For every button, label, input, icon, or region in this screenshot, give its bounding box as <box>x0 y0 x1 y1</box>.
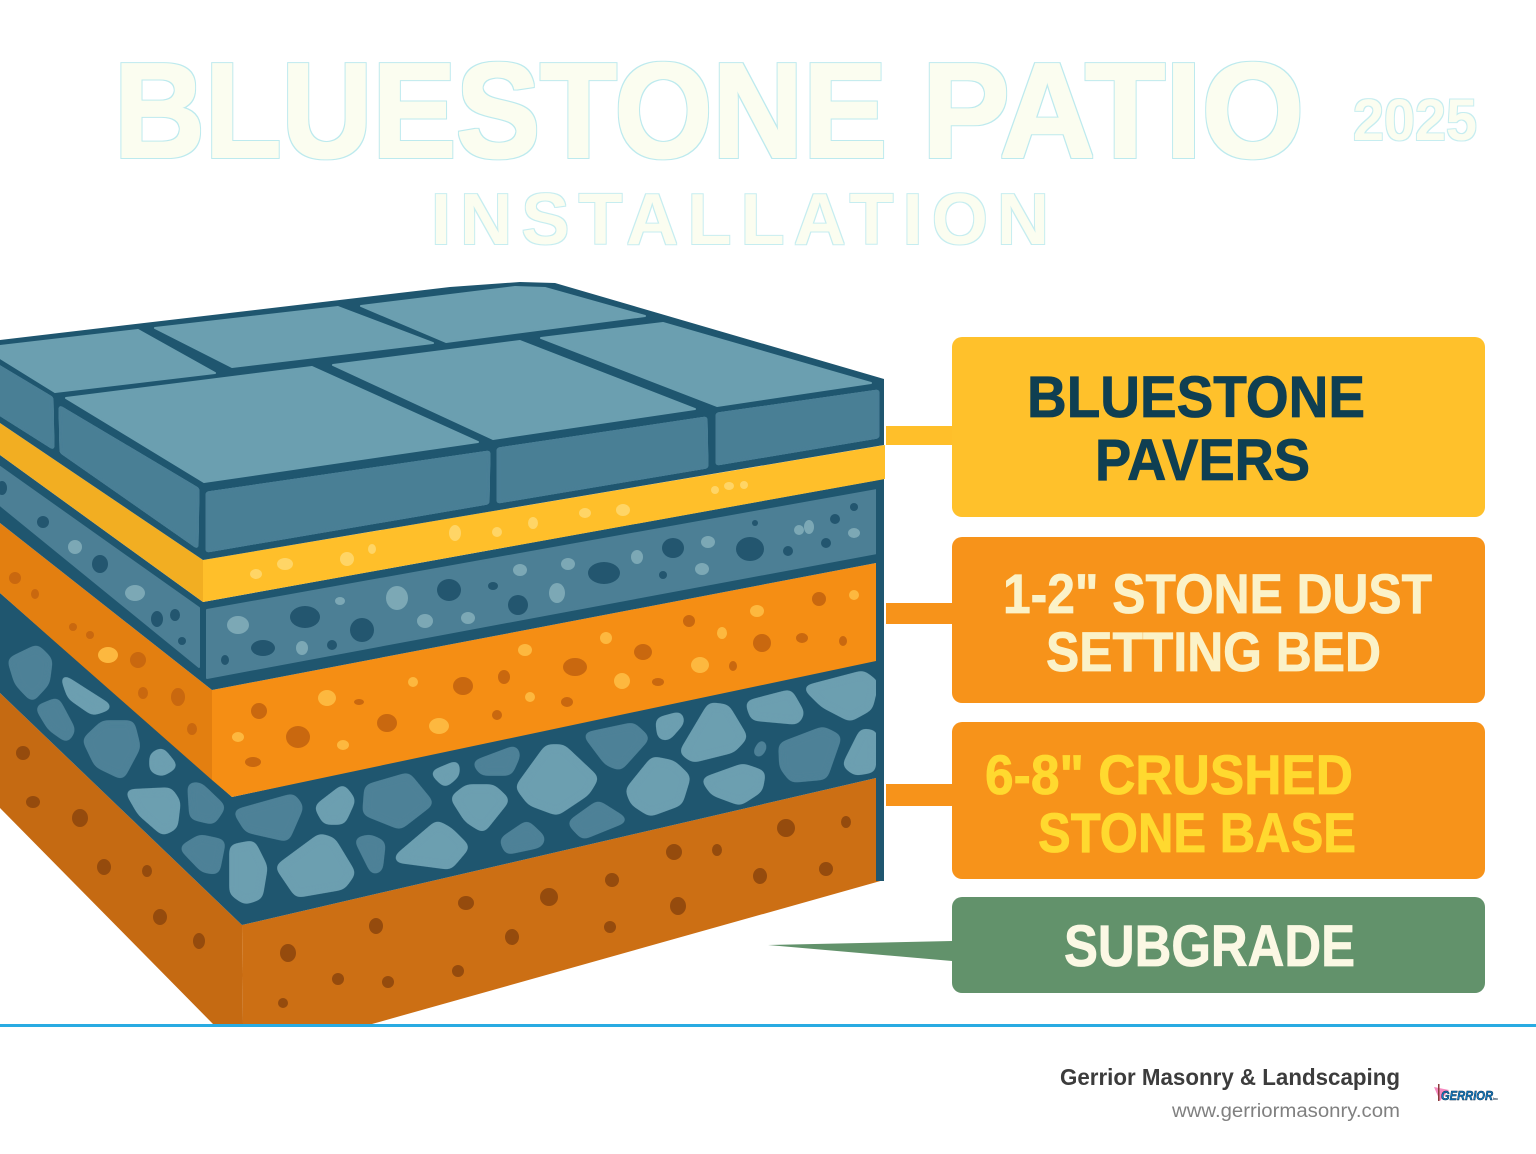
label: bluestone pavers: PAVERS <box>1095 428 1310 493</box>
label: crushed stone base <box>952 722 1485 879</box>
subgrade pits <box>16 746 851 1008</box>
light stones <box>63 673 876 902</box>
label: stone dust setting bed <box>952 537 1485 703</box>
paver side faces <box>0 358 878 551</box>
diagram: patio layer cross-section <box>0 282 885 1024</box>
heading: patio: PATIO <box>922 35 1304 186</box>
logo: gerrior: Inc <box>1493 1096 1499 1101</box>
heading: year: 2025 <box>1353 88 1477 153</box>
logo: gerrior <box>1434 1084 1499 1103</box>
footer: website: www.gerriormasonry.com <box>1171 1101 1400 1122</box>
light grains <box>98 590 859 750</box>
label: bluestone pavers: BLUESTONE <box>1027 365 1365 430</box>
dark grains <box>9 572 847 767</box>
label: stone dust setting bed: 1-2" STONE DUST <box>1003 562 1432 625</box>
title: bluestone patio installation <box>114 35 1477 260</box>
footer rule <box>0 1024 1536 1027</box>
label: crushed stone base: STONE BASE <box>1038 801 1356 864</box>
logo: gerrior: GERRIOR <box>1441 1088 1494 1103</box>
subheading: installation: INSTALLATION <box>431 180 1049 260</box>
connector: crushed stone <box>886 784 952 806</box>
paver top faces <box>0 287 871 482</box>
mid stones <box>10 647 839 872</box>
label: subgrade: SUBGRADE <box>1064 914 1355 979</box>
layer: bluestone pavers <box>0 282 884 560</box>
label: bluestone pavers <box>952 337 1485 517</box>
layer: dust band <box>0 455 884 690</box>
label: stone dust setting bed: SETTING BED <box>1046 620 1381 683</box>
heading: bluestone: BLUESTONE <box>114 35 887 186</box>
light aggregates <box>68 520 860 655</box>
right edge strip <box>876 479 884 881</box>
sand grains <box>250 481 748 579</box>
layer: subgrade <box>0 693 884 1024</box>
label: subgrade <box>952 897 1485 993</box>
connector: pavers <box>886 426 952 445</box>
connector: subgrade <box>768 941 952 961</box>
dark aggregates <box>0 481 858 665</box>
layer: yellow sand band <box>0 423 885 602</box>
layer: crushed stone base <box>0 593 884 925</box>
footer: company name: Gerrior Masonry & Landscaping <box>1060 1064 1400 1090</box>
label: crushed stone base: 6-8" CRUSHED <box>985 743 1353 806</box>
connector: stone dust <box>886 603 952 624</box>
layer: stone dust setting bed <box>0 523 876 797</box>
